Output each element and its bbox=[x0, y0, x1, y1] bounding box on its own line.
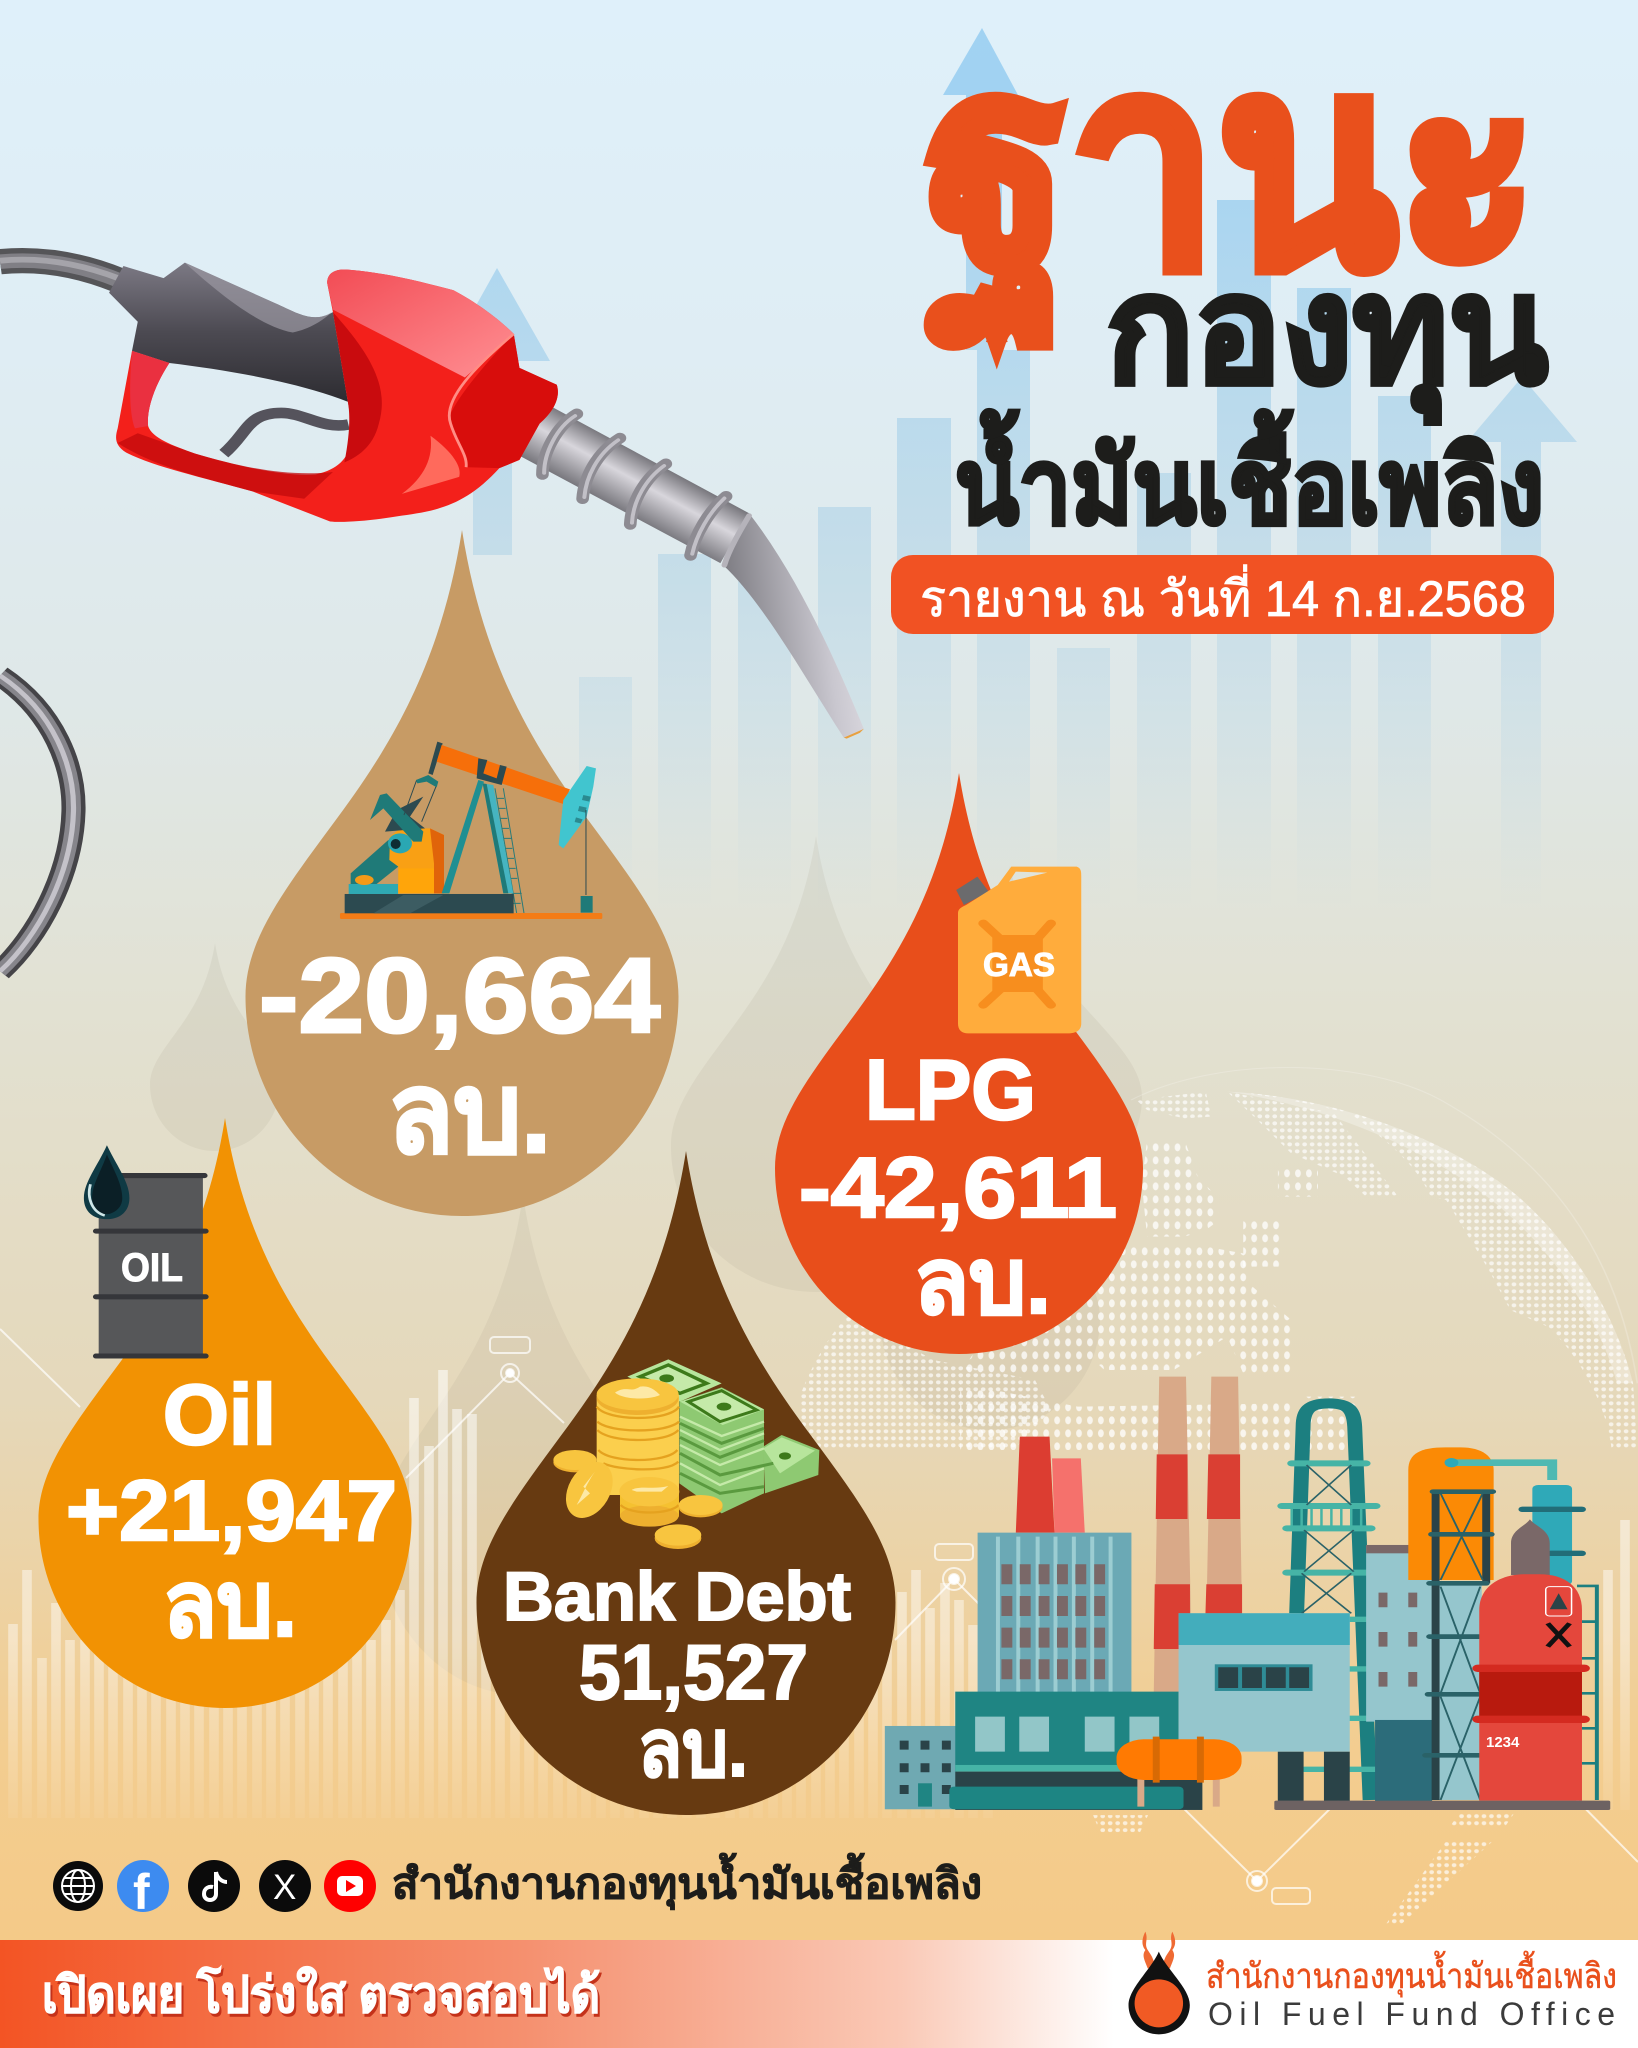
faded background drops bbox=[150, 836, 1142, 1695]
date badge: รายงาน ณ วันที่ 14 ก.ย.2568 bbox=[920, 565, 1526, 627]
drop: LPG: -42,611 bbox=[799, 1141, 1117, 1236]
factory base bbox=[1274, 1801, 1610, 1810]
spout bbox=[723, 513, 864, 738]
background stripes chart bbox=[13, 1370, 1625, 1818]
drop: bank debt bbox=[476, 1151, 896, 1815]
dark lattice tower bbox=[1426, 1492, 1493, 1800]
grip highlight bbox=[185, 263, 332, 332]
footer band bbox=[0, 1932, 1638, 2048]
drop: oil: ลบ. bbox=[163, 1554, 297, 1656]
drop: LPG: LPG bbox=[865, 1043, 1036, 1138]
right building bbox=[1366, 1545, 1433, 1802]
title line 2: กองทุน bbox=[1106, 246, 1548, 424]
drop: bank debt: 51,527 bbox=[579, 1628, 808, 1716]
social icons bbox=[53, 1860, 376, 1920]
drop: LPG bbox=[775, 773, 1143, 1354]
tank label: 1234 bbox=[1486, 1734, 1520, 1751]
hose lower bbox=[0, 676, 74, 971]
background bar chart with rising arrows bbox=[445, 28, 1577, 921]
factory illustration bbox=[885, 1377, 1610, 1810]
icon: oil pump jack bbox=[340, 742, 602, 919]
drop: LPG: ลบ. bbox=[914, 1231, 1051, 1333]
chart nodes and lines bbox=[0, 1329, 1638, 1904]
drop: oil: +21,947 bbox=[66, 1464, 397, 1559]
metal tube bbox=[514, 402, 749, 563]
red body bbox=[116, 270, 558, 522]
icon: web bbox=[53, 1861, 103, 1911]
icon: tiktok bbox=[188, 1860, 240, 1912]
drop: bank debt: ลบ. bbox=[638, 1704, 748, 1793]
main building bbox=[978, 1533, 1131, 1693]
title line 3: น้ำมันเชื้อเพลิง bbox=[955, 409, 1544, 546]
drop: oil bbox=[38, 1118, 412, 1708]
icon: X: X bbox=[273, 1868, 296, 1907]
icon: youtube bbox=[324, 1860, 376, 1912]
teal vessel and pipe bbox=[1445, 1458, 1597, 1800]
icon: facebook bbox=[117, 1860, 169, 1920]
title line 1: ฐานะ bbox=[925, 3, 1538, 356]
logo bbox=[1129, 1932, 1190, 2034]
drop: bank debt: Bank Debt bbox=[503, 1558, 851, 1635]
grip bbox=[109, 263, 348, 402]
teal hall bbox=[949, 1692, 1202, 1810]
body highlight bbox=[327, 270, 514, 378]
title bbox=[925, 3, 1548, 546]
striped stacks bbox=[1154, 1377, 1242, 1693]
icon: gas can bbox=[956, 867, 1081, 1033]
logo English name: Oil Fuel Fund Office bbox=[1208, 1996, 1615, 2032]
date badge bbox=[891, 555, 1554, 634]
lattice tower bbox=[1282, 1403, 1379, 1800]
drop: oil: OIL bbox=[121, 1246, 183, 1290]
fuel nozzle bbox=[0, 260, 864, 971]
orange column bbox=[1408, 1447, 1494, 1580]
icon: X bbox=[259, 1860, 311, 1912]
trigger bbox=[224, 413, 348, 454]
drop: LPG: GAS bbox=[983, 946, 1055, 983]
red chimneys bbox=[1016, 1437, 1055, 1533]
icon: facebook: f bbox=[133, 1864, 150, 1920]
dotted globe bbox=[800, 1067, 1637, 1450]
drop: tan fund total: -20,664 bbox=[259, 937, 660, 1055]
slogan: เปิดเผย โปร่งใส ตรวจสอบได้ bbox=[42, 1965, 600, 2023]
drop: tan fund total bbox=[246, 530, 678, 1216]
center building bbox=[1179, 1613, 1350, 1801]
hose upper bbox=[0, 260, 119, 281]
red cylinder bbox=[1478, 1519, 1584, 1801]
orange tank bbox=[1117, 1737, 1242, 1807]
drop: oil: Oil bbox=[163, 1368, 276, 1463]
globe lower dots bbox=[1093, 1812, 1515, 1925]
icon: oil barrel bbox=[84, 1145, 206, 1358]
small building bbox=[885, 1726, 957, 1809]
icon: coins and cash bbox=[553, 1359, 819, 1549]
drop: tan fund total: ลบ. bbox=[388, 1051, 551, 1176]
office name: สำนักงานกองทุนน้ำมันเชื้อเพลิง bbox=[392, 1852, 982, 1910]
tube rings bbox=[542, 414, 749, 565]
